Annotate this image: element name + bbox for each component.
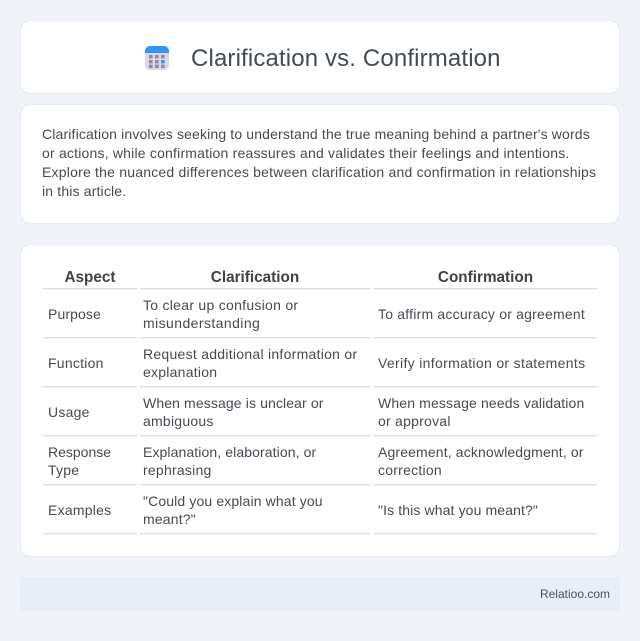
row: response type: Explanation, elaboration, or [143, 444, 316, 460]
row: purpose: Purpose [48, 306, 101, 322]
row: purpose: misunderstanding [143, 315, 260, 331]
row: examples [43, 493, 597, 535]
row: purpose: To clear up confusion or [143, 297, 298, 313]
table header: Clarification [211, 269, 299, 286]
row: examples: meant?" [143, 511, 196, 527]
table header: Aspect [64, 269, 116, 286]
row: response type: rephrasing [143, 462, 212, 478]
row: usage: or approval [378, 413, 451, 429]
row: response type [43, 444, 597, 486]
row: response type: Response [48, 444, 111, 460]
row: usage: Usage [48, 404, 90, 420]
row: function [43, 346, 597, 388]
footer bar [20, 577, 620, 611]
row: function: Verify information or statements [378, 355, 585, 371]
table header [43, 269, 597, 290]
intro text: in this article. [42, 183, 126, 199]
title: Clarification vs. Confirmation [191, 45, 501, 72]
panel: title card [20, 20, 620, 94]
row: examples: "Is this what you meant?" [378, 502, 538, 518]
row: response type: Agreement, acknowledgment, or [378, 444, 584, 460]
table header: Confirmation [438, 269, 533, 286]
intro text [42, 126, 596, 199]
row: examples: "Could you explain what you [143, 493, 323, 509]
row: usage: When message needs validation [378, 395, 584, 411]
row: usage [43, 395, 597, 437]
row: purpose [43, 297, 597, 339]
row: usage: When message is unclear or [143, 395, 324, 411]
row: response type: correction [378, 462, 442, 478]
intro text: Clarification involves seeking to understand the true meaning behind a partner's words [42, 126, 590, 142]
panel: comparison table card [20, 244, 620, 557]
row: function: explanation [143, 364, 217, 380]
panel: intro card [20, 104, 620, 224]
row: function: Request additional information or [143, 346, 357, 362]
row: usage: ambiguous [143, 413, 214, 429]
row: response type: Type [48, 462, 79, 478]
icon: calendar [145, 46, 169, 70]
intro text: Explore the nuanced differences between clarification and confirmation in relationships [42, 164, 596, 180]
row: purpose: To affirm accuracy or agreement [378, 306, 585, 322]
table: comparison [43, 269, 597, 535]
footer credit: Relatioo.com [540, 587, 610, 601]
row: examples: Examples [48, 502, 111, 518]
intro text: or actions, while confirmation reassures and validates their feelings and intentions. [42, 145, 570, 161]
row: function: Function [48, 355, 104, 371]
